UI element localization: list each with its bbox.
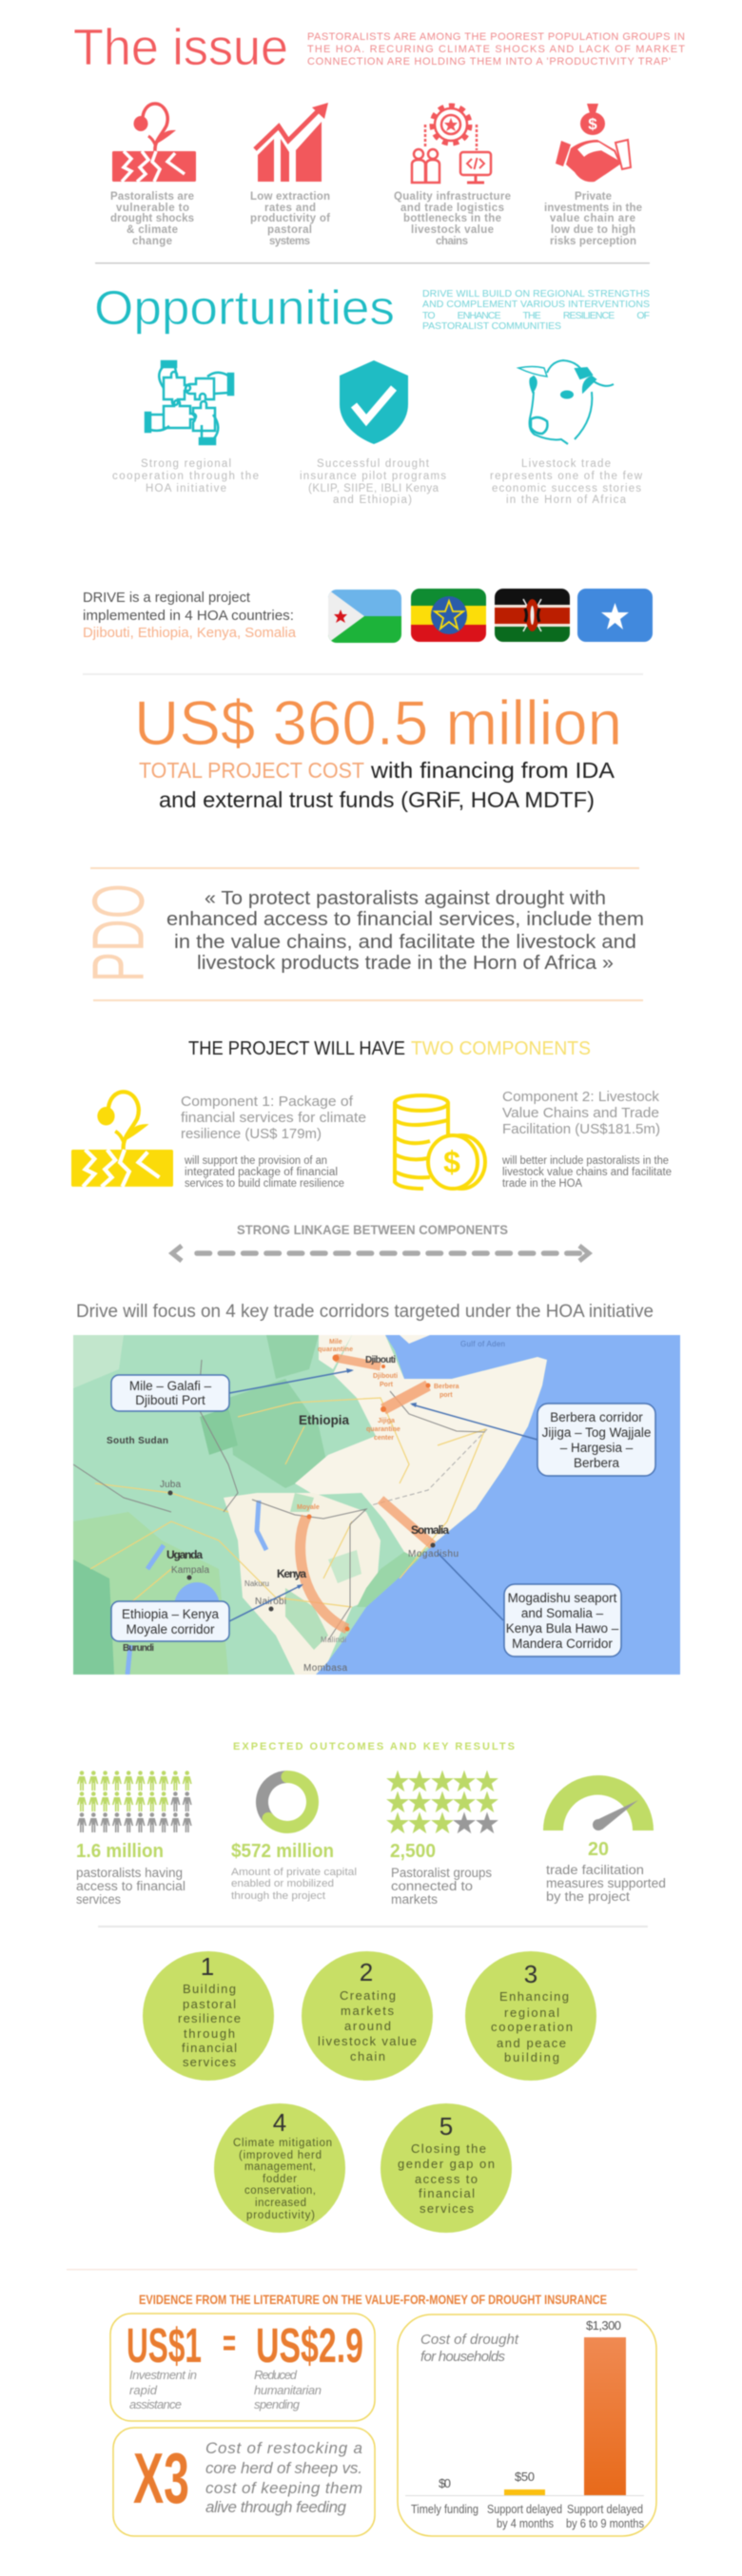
arrows: callout pointers [229,1368,537,1621]
stat: 2,500 pastoralist groups: connected to [391,1879,473,1893]
caption: opportunity 2 [300,458,446,506]
icon: stack of coins: $ [443,1145,460,1179]
heading: The issue: The issue [73,19,288,76]
stat: 572 million private capital: $572 million [231,1841,334,1862]
arrow: double-headed dashed linkage [172,1246,589,1261]
icon: flag of Ethiopia [411,589,486,642]
label: strong linkage: STRONG LINKAGE BETWEEN COMPONENTS [237,1222,508,1237]
caption: issue 4: investments in the [544,203,642,214]
map labels: Mombasa [303,1663,347,1674]
stat: 1.6 million pastoralists: pastoralists having [76,1866,183,1880]
bar chart: household cost [405,2318,644,2530]
text block: component 1 [181,1094,366,1190]
bar chart: household cost: Timely funding [411,2503,478,2516]
icon: flag of Somalia [577,589,653,642]
callout: Mile - Galafi - Djibouti Port: Mile – Galafi – [129,1379,212,1393]
pillar 5: Closing the [411,2141,486,2156]
panel: cost of drought for households: Cost of drought [420,2332,519,2348]
map: trade corridors in the Horn of Africa [73,1335,680,1675]
text block: issue summary: THE HOA. RECURING CLIMATE SHOCKS AND LACK OF MARKET [307,44,685,55]
stat: 572 million private capital [231,1841,357,1902]
pillar 3: building [504,2050,559,2064]
panel: cost of drought for households: for households [420,2349,506,2365]
bar chart: household cost: Support delayed [487,2503,562,2516]
text block: component 2: trade in the HOA [502,1178,582,1190]
section: total project cost [134,688,622,812]
caption: issue 4: low due to high [551,224,635,236]
heading: two components: TWO COMPONENTS [411,1038,591,1059]
callout: Ethiopia - Kenya Moyale corridor: Ethiopia – Kenya [122,1607,220,1621]
text block: component 2: Facilitation (US$181.5m) [502,1121,660,1137]
bar chart: household cost: Support delayed [567,2503,643,2516]
pillar 4: Climate mitigation [233,2138,332,2149]
pillar 4: 4 [273,2108,286,2137]
label: PDO: PDO [76,883,160,982]
panel: X3 restocking cost: X3 [133,2438,189,2518]
map labels: Mogadishu [408,1549,459,1559]
heading: Opportunities: Opportunities [94,281,395,335]
map labels: quarantine [366,1426,400,1433]
map labels: South Sudan [107,1436,168,1446]
map labels: Burundi [123,1643,154,1654]
pillar 5: gender gap on [398,2157,495,2171]
icon: rising bar chart [255,103,328,182]
callout: Mogadishu seaport: Mandera Corridor [512,1637,613,1651]
pillar 1 [143,1951,274,2081]
text block: issue summary [307,31,685,68]
caption: issue 3: Quality infrastructure [394,191,511,203]
caption: issue 3: livestock value [411,224,494,236]
callout: Berbera corridor: Jijiga – Tog Wajjale [542,1425,651,1440]
panel: project development objective [76,883,644,982]
map labels: port [439,1392,453,1399]
pillar 2 [302,1951,433,2081]
stat: 572 million private capital: enabled or mobilized [231,1878,334,1889]
pillar 4 [214,2103,345,2233]
text block: PDO quote: « To protect pastoralists against drought with [205,887,606,909]
stat: 20 trade facilitation measures: by the project [546,1889,630,1904]
stat: 1.6 million pastoralists: services [76,1892,121,1907]
map labels: Ethiopia [299,1412,349,1427]
panel: US$1 equals US$2.9: humanitarian [254,2383,322,2397]
callout: Mile - Galafi - Djibouti Port: Djibouti Port [135,1393,205,1407]
text block: component 1: integrated package of financial [185,1167,338,1178]
text block: opportunities summary: TO ENHANCE THE RESILIENCE OF [422,310,650,321]
pillar 1: pastoral [183,1997,236,2011]
text block: component 1: resilience (US$ 179m) [181,1126,322,1142]
text block: PDO quote: in the value chains, and facilitate the livestock and [174,931,636,953]
panel: X3 restocking cost: cost of keeping them [205,2479,362,2497]
caption: opportunity 2: Successful drought [317,458,430,470]
text block: opportunities summary: PASTORALIST COMMUNITIES [422,320,561,332]
pillar 1: 1 [201,1952,214,1981]
map labels: Berbera [434,1384,459,1390]
icon: stack of coins [395,1095,485,1189]
icon: plant on cracked ground [112,104,196,182]
icon: money bag and handshake: $ [588,115,597,133]
caption: issue 1 [110,191,194,247]
text block: PDO quote: enhanced access to financial services, include them [166,908,644,930]
panel: X3 restocking cost: Cost of restocking a [205,2439,362,2457]
caption: issue 2: systems [269,236,310,247]
panel: US$1 equals US$2.9: rapid [129,2383,158,2397]
stat: 1.6 million pastoralists: 1.6 million [76,1841,164,1862]
panel: X3 restocking cost [113,2428,375,2536]
corridor: Berbera [383,1385,428,1409]
map labels: Nairobi [255,1597,286,1607]
caption: issue 4: risks perception [550,236,636,247]
caption: issue 4 [544,191,642,247]
stat: 20 trade facilitation measures: trade facilitation [546,1863,644,1877]
text block: opportunities summary [422,288,650,332]
panel: X3 restocking cost: alive through feeding [205,2498,347,2516]
map labels: Uganda [166,1548,203,1561]
map labels: Somalia [411,1523,449,1537]
stat: 20 trade facilitation measures: 20 [588,1839,609,1860]
pillar 1: resilience [178,2011,241,2025]
panel: US$1 equals US$2.9: US$1 [127,2318,202,2373]
icon: puzzle pieces held by hands [146,361,233,444]
pillar 5: access to [415,2172,478,2186]
pillar 3: Enhancing [499,1989,569,2004]
text block: component 2: Component 2: Livestock [502,1089,660,1105]
section: expected outcomes [76,1741,666,1907]
callout: Mile - Galafi - Djibouti Port [111,1375,229,1411]
heading: trade corridors: Drive will focus on 4 key trade corridors targeted under the HOA initiative [76,1302,654,1322]
pillar 2: Creating [340,1988,396,2003]
heading: expected outcomes: EXPECTED OUTCOMES AND KEY RESULTS [233,1741,515,1753]
text block: component 2: livestock value chains and facilitate [502,1167,672,1178]
caption: issue 1: drought shocks [110,213,194,224]
text block: DRIVE description: DRIVE is a regional project [83,590,251,606]
caption: opportunity 1: HOA initiative [146,483,226,494]
map labels: Djibouti [373,1373,398,1380]
text block: PDO quote: livestock products trade in the Horn of Africa » [197,952,614,974]
caption: issue 2: pastoral [267,224,312,236]
map labels: quarantine [318,1346,353,1353]
stat: 20 trade facilitation measures: measures supported [546,1876,666,1890]
pillar 3: regional [504,2005,559,2020]
text block: component 1: will support the provision of an [184,1155,327,1167]
callout: Mogadishu seaport: Kenya Bula Hawo – [506,1621,619,1636]
stat: 572 million private capital: Amount of private capital [231,1867,357,1878]
panel: US$1 equals US$2.9: US$2.9 [256,2318,363,2373]
caption: issue 3: bottlenecks in the [403,213,501,224]
caption: issue 4: Private [575,191,612,203]
pillar 3: and peace [497,2036,566,2050]
caption: opportunity 2: (KLIP, SIIPE, IBLI Kenya [308,483,439,494]
caption: issue 4: value chain are [550,213,635,224]
caption: issue 1: Pastoralists are [110,191,194,203]
map labels: Mile [329,1339,342,1346]
section: evidence on value for money [110,2292,656,2536]
caption: issue 3: chains [436,236,468,247]
text block: component 1: financial services for climate [181,1110,366,1126]
icon: flag of Djibouti [328,590,401,643]
text block: DRIVE description: implemented in 4 HOA countries: [83,608,294,624]
pillar 5: services [420,2201,474,2216]
callout: Mogadishu seaport: Mogadishu seaport [508,1591,617,1605]
text block: DRIVE description [83,590,297,641]
pillar 2: 2 [360,1958,373,1986]
map labels: Juba [160,1480,181,1490]
pillar 2: around [344,2019,391,2033]
caption: issue 1: change [132,236,172,247]
corridor: Moyale [301,1517,347,1629]
chart: star rating [386,1771,498,1833]
pillar 3 [465,1951,596,2081]
panel: US$1 equals US$2.9 [110,2314,375,2421]
caption: opportunity 3: represents one of the few [490,471,643,482]
section: five pillars [143,1951,596,2233]
text block: issue summary: CONNECTION ARE HOLDING THEM INTO A 'PRODUCTIVITY TRAP' [307,56,671,68]
heading: two components: THE PROJECT WILL HAVE [188,1038,405,1059]
heading: two components [188,1038,591,1059]
text block: issue summary: PASTORALISTS ARE AMONG THE POOREST POPULATION GROUPS IN [307,31,685,43]
text block: component 1: services to build climate resilience [185,1178,344,1190]
caption: opportunity 3: in the Horn of Africa [506,494,627,506]
bar chart: household cost: $1,300 [586,2318,621,2333]
corridor: Mile to Djibouti [336,1358,381,1366]
icon: shield with check [340,360,408,444]
caption: opportunity 3: Livestock trade [521,458,611,470]
stat: 1.6 million pastoralists [76,1841,186,1907]
pillar 3: 3 [524,1960,537,1988]
pillar 5: 5 [439,2112,453,2140]
pillar 4: increased [255,2198,306,2209]
map labels: Gulf of Aden [460,1340,505,1348]
bar chart: household cost: $50 [515,2469,535,2484]
map labels: Malindi [321,1636,346,1644]
caption: issue 2: Low extraction [250,191,330,203]
panel: US$1 equals US$2.9: Investment in [129,2368,197,2382]
panel: US$1 equals US$2.9: Reduced [254,2368,298,2382]
text block: component 1: Component 1: Package of [181,1094,354,1110]
map labels: Nakuru [244,1579,269,1588]
caption: issue 1: & climate [127,224,178,236]
text block: financing sources: with financing from IDA [370,758,615,783]
caption: opportunity 1: cooperation through the [112,471,259,482]
caption: issue 2: productivity of [250,213,330,224]
text block: DRIVE description: Djibouti, Ethiopia, Kenya, Somalia [83,625,297,641]
pillar 4: fodder [263,2174,297,2185]
pillar 1: Building [183,1982,236,1996]
pillar 2: chain [350,2049,385,2063]
stat: 20 trade facilitation measures [546,1839,666,1904]
text block: PDO quote [166,887,644,974]
callout: Berbera corridor [537,1404,655,1476]
callout: Berbera corridor: Berbera corridor [550,1410,643,1424]
text block: financing sources [139,758,615,812]
text block: opportunities summary: DRIVE WILL BUILD ON REGIONAL STRENGTHS [422,288,650,300]
bar chart: household cost: $0 [439,2476,451,2490]
caption: opportunity 2: insurance pilot programs [300,471,446,482]
text block: component 2: Value Chains and Trade [502,1105,659,1121]
stat: 2,500 pastoralist groups: Pastoralist groups [391,1866,492,1880]
callout: Berbera corridor: – Hargesia – [560,1441,634,1455]
section: two components [71,1038,672,1261]
text block: opportunities summary: AND COMPLEMENT VARIOUS INTERVENTIONS [422,299,650,310]
headline number: project cost: US$ 360.5 million [134,688,622,758]
caption: opportunity 1 [112,458,259,494]
caption: opportunity 3 [490,458,643,506]
pillar 1: financial [182,2041,237,2055]
caption: issue 2: rates and [264,203,316,214]
stat: 2,500 pastoralist groups [390,1841,492,1907]
map labels: Jijiga [378,1418,395,1424]
map labels: Port [380,1382,394,1388]
caption: issue 2 [250,191,330,247]
text block: financing sources: and external trust funds (GRiF, HOA MDTF) [159,787,595,812]
callout: Berbera corridor: Berbera [574,1456,620,1470]
map labels: Djibouti [365,1355,396,1365]
chart: donut [262,1776,312,1827]
pillar 5 [381,2103,512,2233]
caption: opportunity 2: and Ethiopia) [333,494,412,506]
panel: X3 restocking cost: core herd of sheep vs. [205,2459,362,2477]
pillar 4: management, [244,2161,316,2173]
corridor: Mogadishu [381,1500,433,1545]
text block: component 2: will better include pastoralists in the [501,1155,669,1167]
pillar 4: productivity) [246,2210,315,2221]
map labels: Kenya [277,1567,306,1580]
caption: issue 1: vulnerable to [116,203,189,214]
icon: cow head [518,360,614,444]
caption: issue 3 [394,191,511,247]
pillar 2: livestock value [318,2034,417,2048]
callout: Mogadishu seaport: and Somalia – [521,1606,604,1620]
map labels: Moyale [297,1504,320,1511]
text block: component 2 [501,1089,672,1190]
text block: financing sources: TOTAL PROJECT COST [139,758,364,783]
pillar 2: markets [341,2004,394,2018]
chart: people pictogram [77,1771,192,1832]
section: opportunities [94,281,650,506]
pillar 3: cooperation [491,2020,573,2034]
stat: 2,500 pastoralist groups: 2,500 [390,1841,436,1862]
panel: US$1 equals US$2.9: = [223,2322,236,2364]
stat: 2,500 pastoralist groups: markets [391,1892,438,1907]
panel: cost of drought for households [398,2315,656,2536]
stat: 1.6 million pastoralists: access to financial [76,1879,186,1893]
bar chart: household cost: by 6 to 9 months [566,2517,644,2530]
map labels: Kampala [171,1565,209,1576]
stat: 572 million private capital: through the project [231,1890,325,1902]
icon: money bag and handshake [556,104,631,182]
map labels [107,1339,505,1674]
pillar 1: through [184,2026,235,2041]
pillar 1: services [183,2055,236,2069]
pillar 4: conservation, [244,2185,316,2197]
pillar 5: financial [419,2186,475,2200]
callout: Ethiopia - Kenya Moyale corridor [111,1601,229,1641]
caption: issue 3: and trade logistics [400,203,504,214]
callout: Ethiopia - Kenya Moyale corridor: Moyale corridor [126,1622,215,1637]
icon: yellow plant on cracked ground [71,1092,173,1187]
caption: opportunity 1: Strong regional [141,458,231,470]
panel: US$1 equals US$2.9: spending [254,2397,301,2411]
panel: US$1 equals US$2.9: assistance [129,2397,182,2411]
icon: gear, people and monitor [412,106,491,183]
bar chart: household cost: by 4 months [497,2517,554,2530]
icon: flag of Kenya [495,589,570,642]
map labels: center [374,1435,394,1442]
heading: evidence: EVIDENCE FROM THE LITERATURE ON THE VALUE-FOR-MONEY OF DROUGHT INSURANCE [139,2292,607,2307]
pillar 4: (improved herd [239,2150,322,2161]
section: the issue [73,19,685,247]
chart: gauge [543,1775,654,1830]
caption: opportunity 3: economic success stories [492,483,641,494]
callout: Mogadishu seaport [504,1584,621,1656]
section: project countries [83,589,653,643]
